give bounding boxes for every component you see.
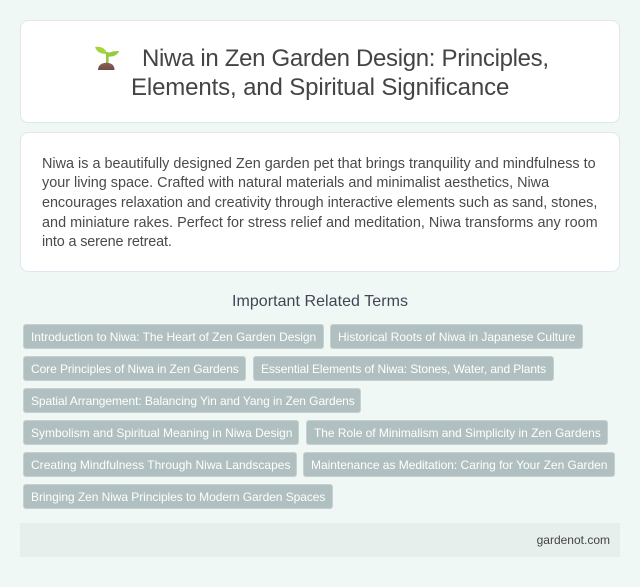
panel: description: and miniature rakes. Perfect for stress relief and meditation, Niwa transforms any room [42, 215, 598, 231]
tag list: Symbolism and Spiritual Meaning in Niwa Design [31, 426, 292, 440]
panel: description: encourages relaxation and creativity through interactive elements such as sand, stones, [42, 195, 597, 211]
heading: related terms: Important Related Terms [232, 293, 408, 310]
panel: title card [20, 20, 620, 123]
title [131, 45, 549, 101]
panel: description [20, 132, 620, 272]
panel: description: into a serene retreat. [42, 234, 172, 250]
title: Elements, and Spiritual Significance [131, 74, 509, 101]
panel: description: Niwa is a beautifully designed Zen garden pet that brings tranquility and mindfulness to [42, 156, 596, 172]
tag list [23, 324, 615, 509]
tag list: Introduction to Niwa: The Heart of Zen Garden Design [31, 330, 316, 344]
tag list: Core Principles of Niwa in Zen Gardens [31, 362, 239, 376]
icon: seedling [95, 46, 119, 70]
footer text: gardenot.com [537, 533, 610, 547]
tag list: Maintenance as Meditation: Caring for Your Zen Garden [311, 458, 607, 472]
tag list: Essential Elements of Niwa: Stones, Water, and Plants [261, 362, 546, 376]
tag list: Historical Roots of Niwa in Japanese Culture [338, 330, 575, 344]
tag list: The Role of Minimalism and Simplicity in Zen Gardens [314, 426, 601, 440]
title: Niwa in Zen Garden Design: Principles, [142, 45, 549, 72]
tag list: Spatial Arrangement: Balancing Yin and Yang in Zen Gardens [31, 394, 355, 408]
panel: description: your living space. Crafted with natural materials and minimalist aesthetics, Niwa [42, 175, 549, 191]
tag list: Bringing Zen Niwa Principles to Modern Garden Spaces [31, 490, 325, 504]
tag list: Creating Mindfulness Through Niwa Landscapes [31, 458, 290, 472]
footer [20, 523, 620, 557]
